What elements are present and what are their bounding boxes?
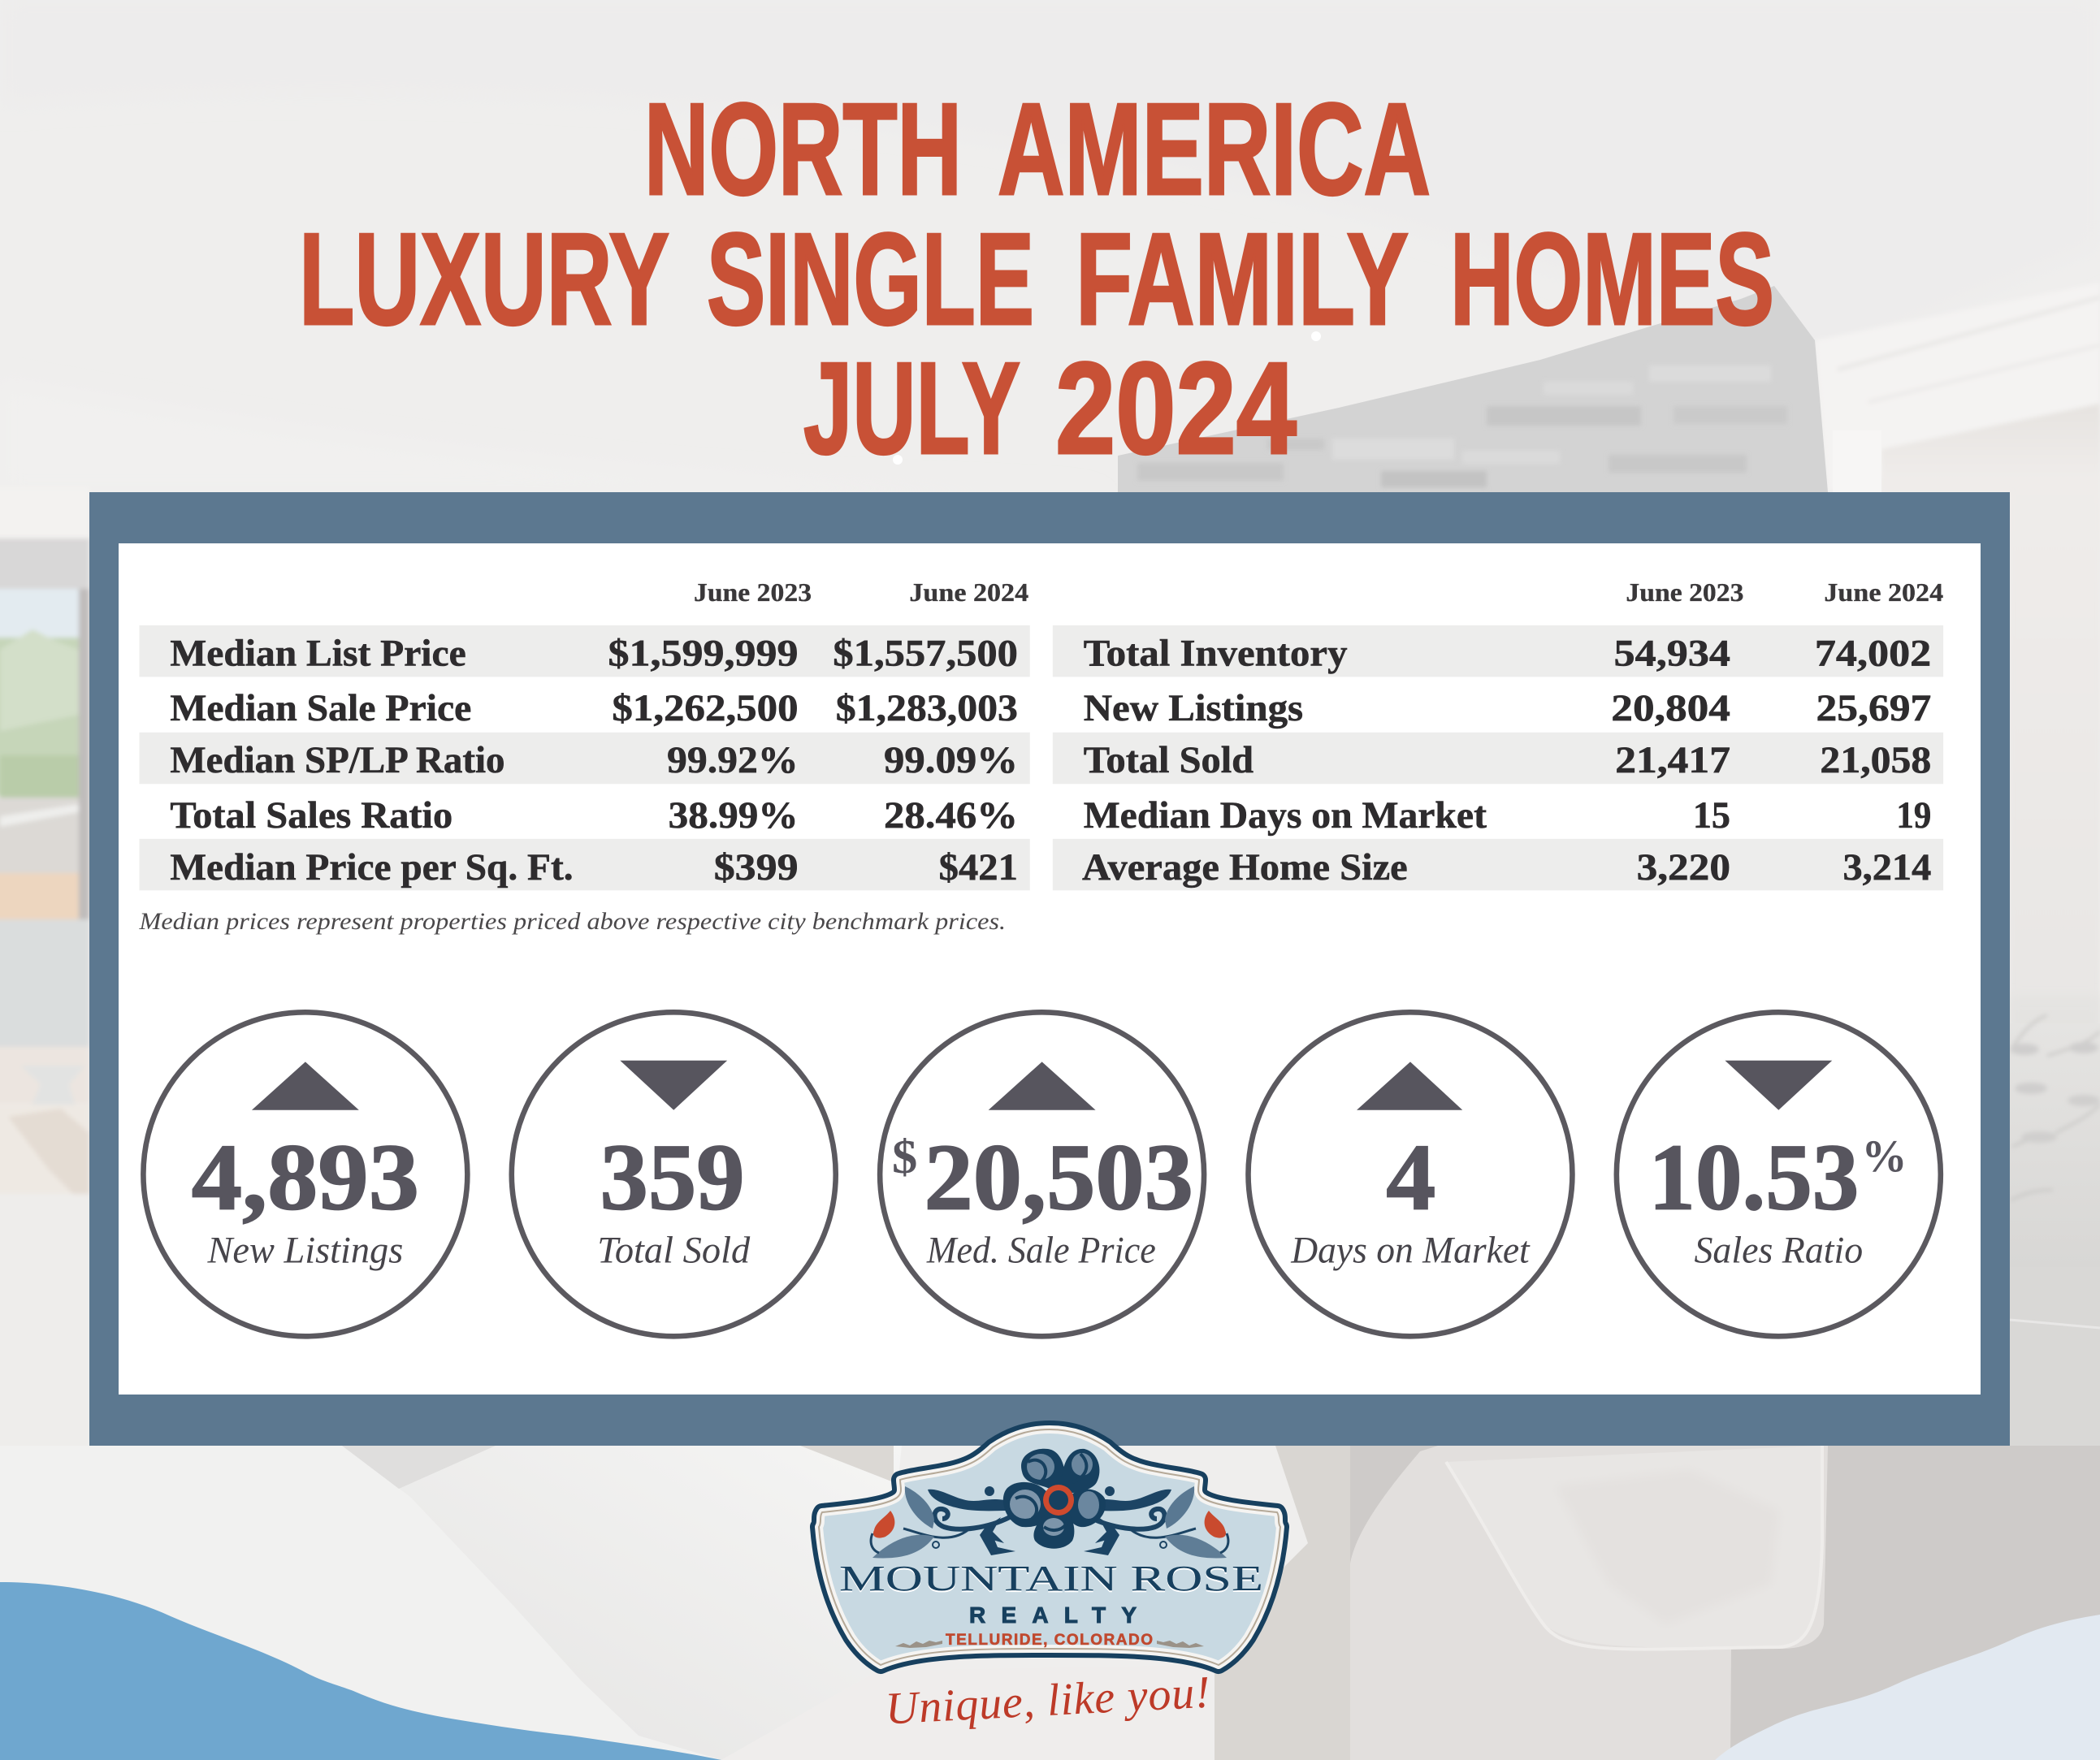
stat: days on market: Days on Market xyxy=(1290,1230,1531,1271)
stat: median sale price xyxy=(880,1012,1204,1336)
stat: median sale price: 20,503 xyxy=(924,1126,1193,1230)
logo wordmark: TELLURIDE, COLORADO xyxy=(946,1632,1153,1649)
table: inventory: 20,804 xyxy=(1611,687,1730,729)
table: list and sale prices: June 2023 xyxy=(694,578,812,607)
stat: sales ratio xyxy=(1617,1012,1941,1336)
table: inventory: Average Home Size xyxy=(1082,846,1408,888)
table: list and sale prices: 99.92% xyxy=(667,739,799,781)
table: inventory: 25,697 xyxy=(1816,687,1931,729)
bottom-left blue wave xyxy=(0,1582,721,1760)
table: inventory: 19 xyxy=(1896,794,1931,836)
table: list and sale prices: Median SP/LP Ratio xyxy=(170,739,505,781)
title: NORTH xyxy=(644,76,962,223)
table: list and sale prices: $421 xyxy=(939,846,1018,888)
ceiling shading xyxy=(0,0,2100,492)
logo shield xyxy=(819,1429,1280,1665)
table: inventory: Total Sold xyxy=(1084,739,1254,781)
footnote: Median prices represent properties priced above respective city benchmark prices. xyxy=(138,909,1006,935)
table: inventory: 54,934 xyxy=(1614,632,1730,673)
table: list and sale prices: 38.99% xyxy=(669,794,799,836)
stone fireplace xyxy=(1118,286,1828,492)
logo: Mountain Rose Realty badge xyxy=(819,1429,1280,1734)
logo flower xyxy=(871,1449,1228,1558)
table: list and sale prices: $1,262,500 xyxy=(612,687,799,729)
logo tagline: Unique, like you! xyxy=(884,1667,1211,1734)
table: list and sale prices: 28.46% xyxy=(884,794,1018,836)
stat: sales ratio: % xyxy=(1862,1132,1907,1183)
stat: sales ratio: 10.53 xyxy=(1648,1126,1859,1230)
stat: days on market: 4 xyxy=(1386,1126,1435,1230)
table: inventory: New Listings xyxy=(1084,687,1303,729)
table: inventory: 21,417 xyxy=(1615,739,1730,781)
right wall xyxy=(1881,404,2100,1023)
table: list and sale prices: Median Price per Sq. Ft. xyxy=(170,846,574,888)
table: inventory: Median Days on Market xyxy=(1084,794,1487,836)
panel: blue frame with white card xyxy=(89,492,2010,1446)
stat: median sale price: $ xyxy=(892,1130,917,1183)
table: inventory: 21,058 xyxy=(1820,739,1931,781)
middle carpet and floor xyxy=(721,1446,1430,1760)
title: HOMES xyxy=(1450,206,1774,352)
stat: median sale price: Med. Sale Price xyxy=(926,1230,1156,1271)
table: inventory: June 2023 xyxy=(1626,578,1743,607)
bottom-right pale blue wave xyxy=(1715,1615,2100,1760)
table: list and sale prices: $1,557,500 xyxy=(833,632,1018,673)
table: list and sale prices xyxy=(139,578,1030,890)
table: list and sale prices: $1,599,999 xyxy=(608,632,799,673)
right sofa xyxy=(2010,995,2100,1446)
stat: new listings: New Listings xyxy=(207,1230,403,1271)
recessed lights xyxy=(1311,331,1321,341)
logo wordmark: MOUNTAIN ROSE xyxy=(839,1560,1263,1600)
title: 2024 xyxy=(1055,335,1297,482)
bottom left sofa cushions xyxy=(0,1446,902,1760)
logo wordmark xyxy=(839,1559,1263,1649)
title: FAMILY xyxy=(1076,206,1409,352)
logo wordmark: REALTY xyxy=(969,1602,1137,1628)
table: inventory: 15 xyxy=(1693,794,1730,836)
table: inventory: June 2024 xyxy=(1824,578,1943,607)
stat: total sold xyxy=(512,1012,836,1336)
stat: sales ratio: Sales Ratio xyxy=(1694,1230,1863,1271)
logo wordmark: MOUNTAIN ROSE xyxy=(839,1559,1263,1598)
table: list and sale prices: 99.09% xyxy=(884,739,1018,781)
table: inventory: 74,002 xyxy=(1815,632,1931,673)
table: list and sale prices: $1,283,003 xyxy=(836,687,1018,729)
title: AMERICA xyxy=(998,76,1431,223)
stat: total sold: 359 xyxy=(600,1126,745,1230)
table: inventory: 3,220 xyxy=(1637,846,1730,888)
stat: new listings xyxy=(143,1012,467,1336)
table: list and sale prices: Median Sale Price xyxy=(170,687,471,729)
title: LUXURY xyxy=(299,206,669,352)
table: list and sale prices: June 2024 xyxy=(909,578,1028,607)
stat: new listings: 4,893 xyxy=(192,1126,419,1230)
table: inventory: 3,214 xyxy=(1842,846,1931,888)
table: list and sale prices: Median List Price xyxy=(170,632,466,673)
table: inventory: Total Inventory xyxy=(1084,632,1347,673)
table: inventory xyxy=(1053,578,1943,890)
table: list and sale prices: $399 xyxy=(714,846,799,888)
stat: days on market xyxy=(1248,1012,1572,1336)
title: JULY xyxy=(803,335,1020,482)
left window and lamp xyxy=(0,487,89,1454)
crown moulding xyxy=(1815,283,2100,492)
table: list and sale prices: Total Sales Ratio xyxy=(170,794,452,836)
title xyxy=(299,76,1774,482)
title: SINGLE xyxy=(707,206,1034,352)
right armchair xyxy=(1350,1446,2100,1760)
stat: total sold: Total Sold xyxy=(597,1230,751,1271)
